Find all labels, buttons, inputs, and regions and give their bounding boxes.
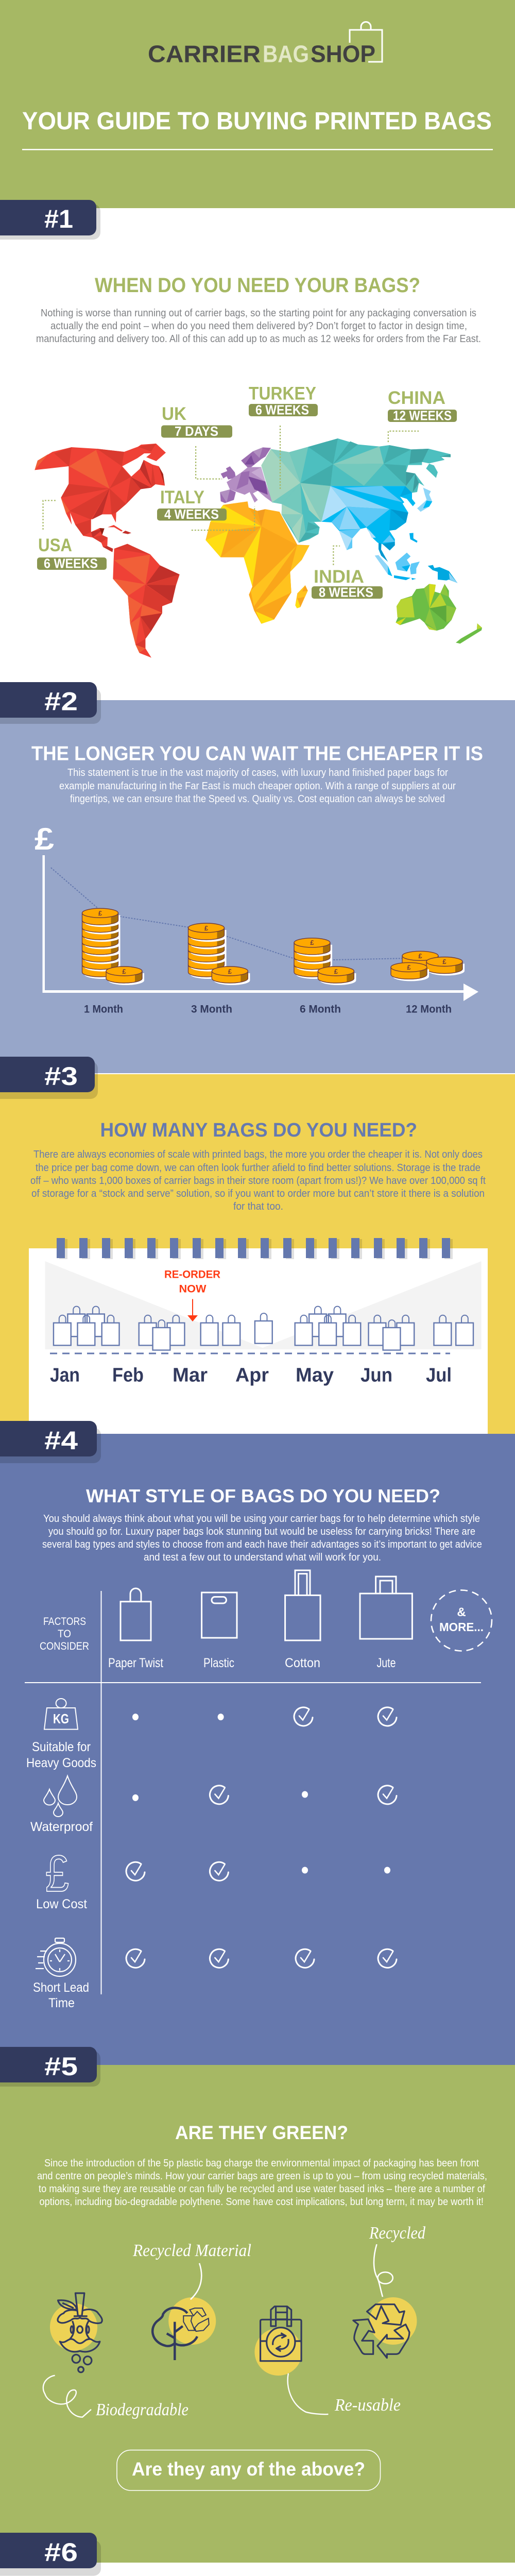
column header: factors <box>40 1616 89 1652</box>
coin stack: 12 month: £ <box>442 958 447 965</box>
row: short lead time: Short Lead <box>33 1980 89 1995</box>
panel: section 3 how many bags <box>0 1057 515 1434</box>
text block: several bag types and styles to choose from and each have their advantages so it’s important to get advice <box>42 1539 482 1550</box>
text block: This statement is true in the vast majority of cases, with luxury hand finished paper bags for <box>67 767 448 778</box>
bags: Jul <box>434 1315 473 1345</box>
panel: section 4 what style of bags <box>0 1421 515 2065</box>
trend line <box>51 868 402 960</box>
x axis labels <box>84 1004 452 1015</box>
icon: stopwatch <box>36 1938 76 1976</box>
coin stack: 3 month: £ <box>204 924 209 932</box>
icon: weight <box>44 1699 78 1730</box>
badge: #3 <box>0 1057 98 1099</box>
map label: UK: 7 DAYS <box>175 423 218 439</box>
row: heavy goods: Suitable for <box>32 1740 91 1754</box>
bags: Feb <box>139 1315 184 1350</box>
icon: re-usable bag <box>254 2307 302 2376</box>
text block: actually the end point – when do you need them delivered by? Don’t forget to factor in design time, <box>50 320 467 332</box>
re-order callout <box>164 1268 220 1321</box>
map: Europe <box>220 447 272 503</box>
text block <box>59 767 456 805</box>
text block: manufacturing and delivery too. All of this can add up to as much as 12 weeks for orders from the Far East. <box>36 333 481 345</box>
map label: China <box>388 388 457 423</box>
x axis labels: 6 Month <box>300 1004 341 1015</box>
axes <box>42 855 478 1001</box>
text block: of storage for a “stock and serve” solution, so if you want to order more but can’t store it there is a solution <box>31 1188 485 1199</box>
text block <box>37 2158 487 2208</box>
heading: ARE THEY GREEN? <box>175 2122 348 2143</box>
coin stack: 3 month <box>188 923 250 985</box>
chalk line: biodegradable <box>43 2376 91 2417</box>
column header: factors: CONSIDER <box>40 1640 89 1652</box>
y axis pound symbol: £ <box>35 822 54 856</box>
map: Americas <box>35 444 180 658</box>
badge: #2: #2 <box>44 687 78 716</box>
text block: to making sure they are reusable or can fully be recycled and use water based inks – there are a number of <box>39 2183 485 2195</box>
text block: fingertips, we can ensure that the Speed vs. Quality vs. Cost equation can always be solved <box>70 793 445 805</box>
calendar <box>29 1238 488 1434</box>
logo: BAG <box>263 40 309 67</box>
bags: May <box>295 1307 360 1345</box>
bag type labels <box>108 1656 396 1670</box>
callout button: Are they any of the above? <box>132 2459 365 2480</box>
badge: #1: #1 <box>44 205 73 233</box>
label: re-usable: Re-usable <box>334 2396 401 2415</box>
logo: CARRIER <box>148 40 261 67</box>
logo <box>148 22 382 67</box>
coin stack: 6 month <box>294 938 356 985</box>
text block: and centre on people’s minds. How your carrier bags are green is up to you – from using recycled materials, <box>37 2171 487 2182</box>
panel: section 6 what do you want printed <box>0 2533 515 2576</box>
badge: #3: #3 <box>44 1062 78 1091</box>
coin stack: 12 month: £ <box>418 952 422 960</box>
bag type labels: Paper Twist <box>108 1656 163 1670</box>
month labels: Feb <box>112 1364 144 1386</box>
map label: China: CHINA <box>388 388 445 408</box>
badge: #4 <box>0 1421 101 1463</box>
map: Africa, Asia, Oceania <box>205 438 482 643</box>
bag icon: plastic <box>202 1592 237 1638</box>
callout: and more <box>431 1590 492 1651</box>
bag type labels: Cotton <box>285 1656 320 1670</box>
row: heavy goods <box>26 1699 397 1770</box>
text block <box>36 308 481 345</box>
map label: Turkey: 6 WEEKS <box>255 402 309 417</box>
row: heavy goods: Heavy Goods <box>26 1756 96 1770</box>
re-order callout: RE-ORDER <box>164 1268 220 1281</box>
row: waterproof: Waterproof <box>30 1820 93 1834</box>
coin stack: 6 month: £ <box>334 968 338 975</box>
coin stack: 1 month: £ <box>98 909 102 917</box>
re-order callout: NOW <box>179 1283 207 1295</box>
world map <box>35 438 482 658</box>
label: recycled: Recycled <box>369 2224 426 2243</box>
chalk line: re-usable <box>288 2374 328 2414</box>
text block: Nothing is worse than running out of carrier bags, so the starting point for any packaging conversation is <box>41 308 476 319</box>
badge: #2 <box>0 682 101 724</box>
coin stack: 12 month <box>391 951 465 981</box>
map label: UK <box>161 404 232 439</box>
text block: you should go for. Luxury paper bags look stunning but would be useless for carrying bricks! There are <box>48 1526 475 1537</box>
bags: Mar <box>201 1315 240 1345</box>
title: YOUR GUIDE TO BUYING PRINTED BAGS <box>22 108 492 135</box>
text block: options, including bio-degradable polythene. Some have cost implications, but long term, it may be worth it! <box>39 2196 484 2208</box>
map label: Italy <box>157 487 227 522</box>
coin stack: 1 month <box>82 908 144 985</box>
icon: weight: KG <box>53 1711 69 1726</box>
row: waterproof <box>30 1776 397 1834</box>
icon: biodegradable apple <box>50 2293 102 2372</box>
map leader lines <box>43 426 419 565</box>
text block <box>42 1513 482 1563</box>
badge: #6: #6 <box>44 2538 78 2567</box>
month labels: Jun <box>360 1364 392 1386</box>
map label: USA: 6 WEEKS <box>44 555 98 571</box>
month labels: May <box>296 1364 334 1386</box>
map label: Italy: 4 WEEKS <box>164 506 219 522</box>
text block: Since the introduction of the 5p plastic bag charge the environmental impact of packaging has been front <box>44 2158 479 2169</box>
map label: India <box>312 567 383 600</box>
x axis labels: 3 Month <box>191 1004 232 1015</box>
callout: and more: & <box>457 1605 466 1619</box>
chalk line: recycled material <box>191 2263 201 2299</box>
stock bags chart <box>54 1307 473 1350</box>
chalk line: recycled <box>374 2244 393 2297</box>
panel: section 1 when do you need your bags <box>0 200 515 700</box>
callout: and more: MORE... <box>439 1620 484 1634</box>
map label: USA <box>37 535 107 571</box>
row: low cost: Low Cost <box>36 1897 87 1911</box>
bag type labels: Plastic <box>203 1656 234 1670</box>
heading: WHEN DO YOU NEED YOUR BAGS? <box>95 274 420 297</box>
text block: the price per bag come down, we can often look further afield to find better solutions. Storage is the trade <box>36 1162 480 1174</box>
month labels: Apr <box>235 1364 269 1386</box>
badge: #4: #4 <box>44 1426 78 1455</box>
x axis labels: 1 Month <box>84 1004 123 1015</box>
bag icon: cotton <box>285 1570 320 1640</box>
chart: cost over lead time <box>35 822 478 1015</box>
coin stack: 1 month: £ <box>122 968 126 975</box>
map label: India: 8 WEEKS <box>319 584 373 600</box>
coin stack: 12 month: £ <box>407 963 411 971</box>
text block: for that too. <box>233 1201 283 1212</box>
badge: #1 <box>0 200 100 240</box>
coin stack: 3 month: £ <box>228 968 232 975</box>
text block <box>30 1149 486 1212</box>
month labels: Jan <box>50 1364 80 1386</box>
row: short lead time <box>33 1938 397 2010</box>
column header: factors: FACTORS <box>43 1616 86 1628</box>
bags: Jan <box>54 1307 119 1345</box>
badge: #6 <box>0 2533 101 2576</box>
label: biodegradable: Biodegradable <box>96 2400 188 2419</box>
bag type labels: Jute <box>377 1656 396 1670</box>
text block: off – who wants 1,000 boxes of carrier bags in their store room (apart from us!)? We have over 100,000 sq ft <box>30 1175 486 1187</box>
heading: WHAT STYLE OF BAGS DO YOU NEED? <box>86 1485 440 1506</box>
month labels: Jul <box>426 1364 452 1386</box>
coin stack: 6 month: £ <box>310 939 314 946</box>
icon: pound: £ <box>45 1845 69 1903</box>
map label: India: INDIA <box>314 567 364 587</box>
panel: header <box>0 0 515 208</box>
map label: Italy: ITALY <box>160 487 204 507</box>
badge: #5 <box>0 2047 100 2087</box>
column header: factors: TO <box>58 1628 71 1640</box>
badge: #5: #5 <box>44 2052 78 2081</box>
text block: and test a few out to understand what will work for you. <box>144 1552 381 1563</box>
label: recycled material: Recycled Material <box>132 2241 251 2260</box>
map label: Turkey: TURKEY <box>249 383 316 404</box>
month labels: Mar <box>173 1364 208 1386</box>
icon: water drops <box>44 1776 77 1817</box>
row: low cost <box>36 1845 390 1911</box>
heading: THE LONGER YOU CAN WAIT THE CHEAPER IT IS <box>31 743 483 765</box>
row: short lead time: Time <box>48 1996 75 2010</box>
panel: section 5 are they green <box>0 2047 515 2563</box>
bag icon: paper twist <box>121 1588 151 1640</box>
callout button <box>117 2450 380 2490</box>
map label: UK: UK <box>162 404 186 424</box>
x axis labels: 12 Month <box>406 1004 452 1015</box>
bags: Jun <box>369 1315 414 1350</box>
icon: recycled symbol <box>353 2297 417 2358</box>
text block: There are always economies of scale with printed bags, the more you order the cheaper it is. Not only does <box>33 1149 483 1160</box>
panel: section 2 the longer you can wait <box>0 682 515 1074</box>
bag icon: jute <box>360 1577 412 1639</box>
map label: Turkey <box>249 383 318 417</box>
calendar binding rings <box>57 1238 453 1259</box>
heading: HOW MANY BAGS DO YOU NEED? <box>100 1120 417 1141</box>
logo: SHOP <box>311 40 375 67</box>
text block: example manufacturing in the Far East is much cheaper option. With a range of suppliers at our <box>59 781 456 792</box>
text block: You should always think about what you will be using your carrier bags for to help determine which style <box>43 1513 480 1524</box>
month labels <box>50 1364 452 1386</box>
map label: China: 12 WEEKS <box>393 408 452 423</box>
comparison table <box>25 1570 492 2010</box>
bags: Apr <box>255 1313 272 1344</box>
icon: recycled material tree <box>152 2297 216 2360</box>
map label: USA: USA <box>38 535 72 555</box>
